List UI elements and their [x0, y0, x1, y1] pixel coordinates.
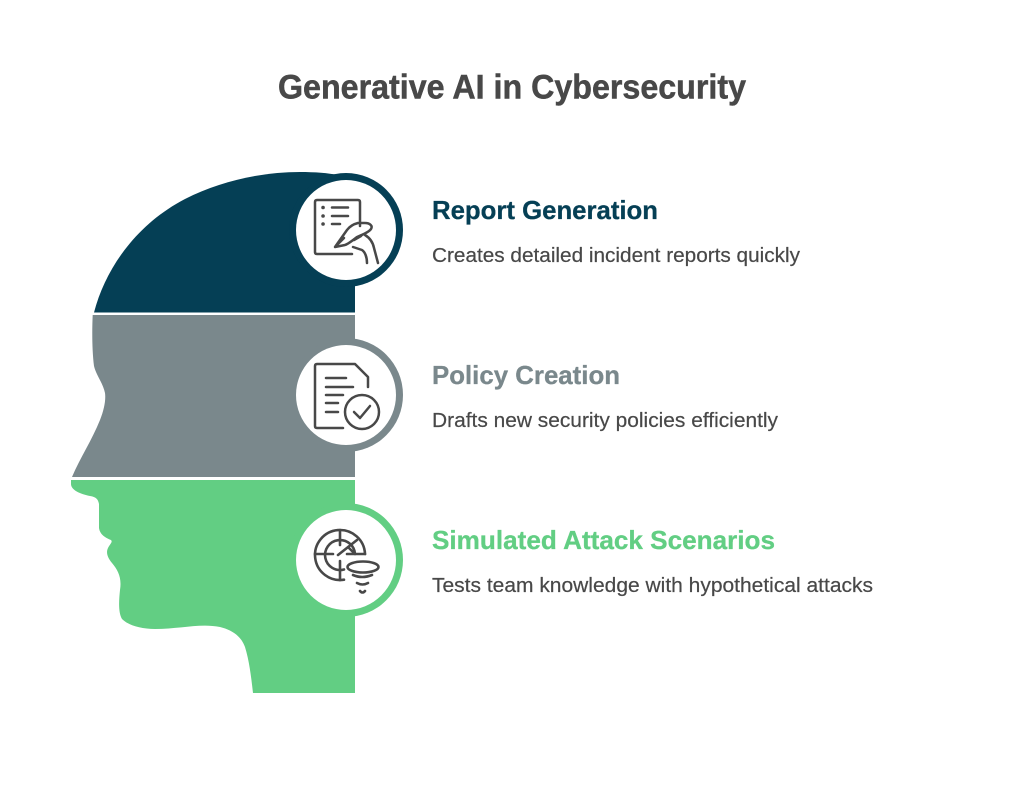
icon: radar and funnel: [315, 530, 378, 592]
heading: report generation: Report Generation: [432, 195, 658, 225]
text: policy creation description: Drafts new security policies efficiently: [432, 410, 778, 432]
icon badge ring: [289, 338, 403, 452]
head segment: forehead and nose bridge: [72, 315, 355, 477]
panel: head bottom, simulated attack scenarios: [71, 480, 403, 693]
head segment: crown: [94, 172, 355, 312]
icon badge: [296, 510, 396, 610]
icon: document with check mark: [315, 364, 379, 429]
panel: head top, report generation: [94, 172, 403, 312]
icon badge ring: [289, 173, 403, 287]
icon badge ring: [289, 503, 403, 617]
heading: simulated attack scenarios: Simulated Attack Scenarios: [432, 525, 775, 555]
icon: document with writing hand: [315, 200, 378, 263]
title: Generative AI in Cybersecurity: [278, 68, 746, 106]
text: simulated attack scenarios description: Tests team knowledge with hypothetical attacks: [432, 575, 873, 597]
icon badge: [296, 345, 396, 445]
text: report generation description: Creates detailed incident reports quickly: [432, 245, 800, 267]
icon badge: [296, 180, 396, 280]
heading: policy creation: Policy Creation: [432, 360, 620, 390]
head segment: nose, mouth, chin and neck: [71, 480, 355, 693]
panel: head middle, policy creation: [72, 315, 403, 477]
